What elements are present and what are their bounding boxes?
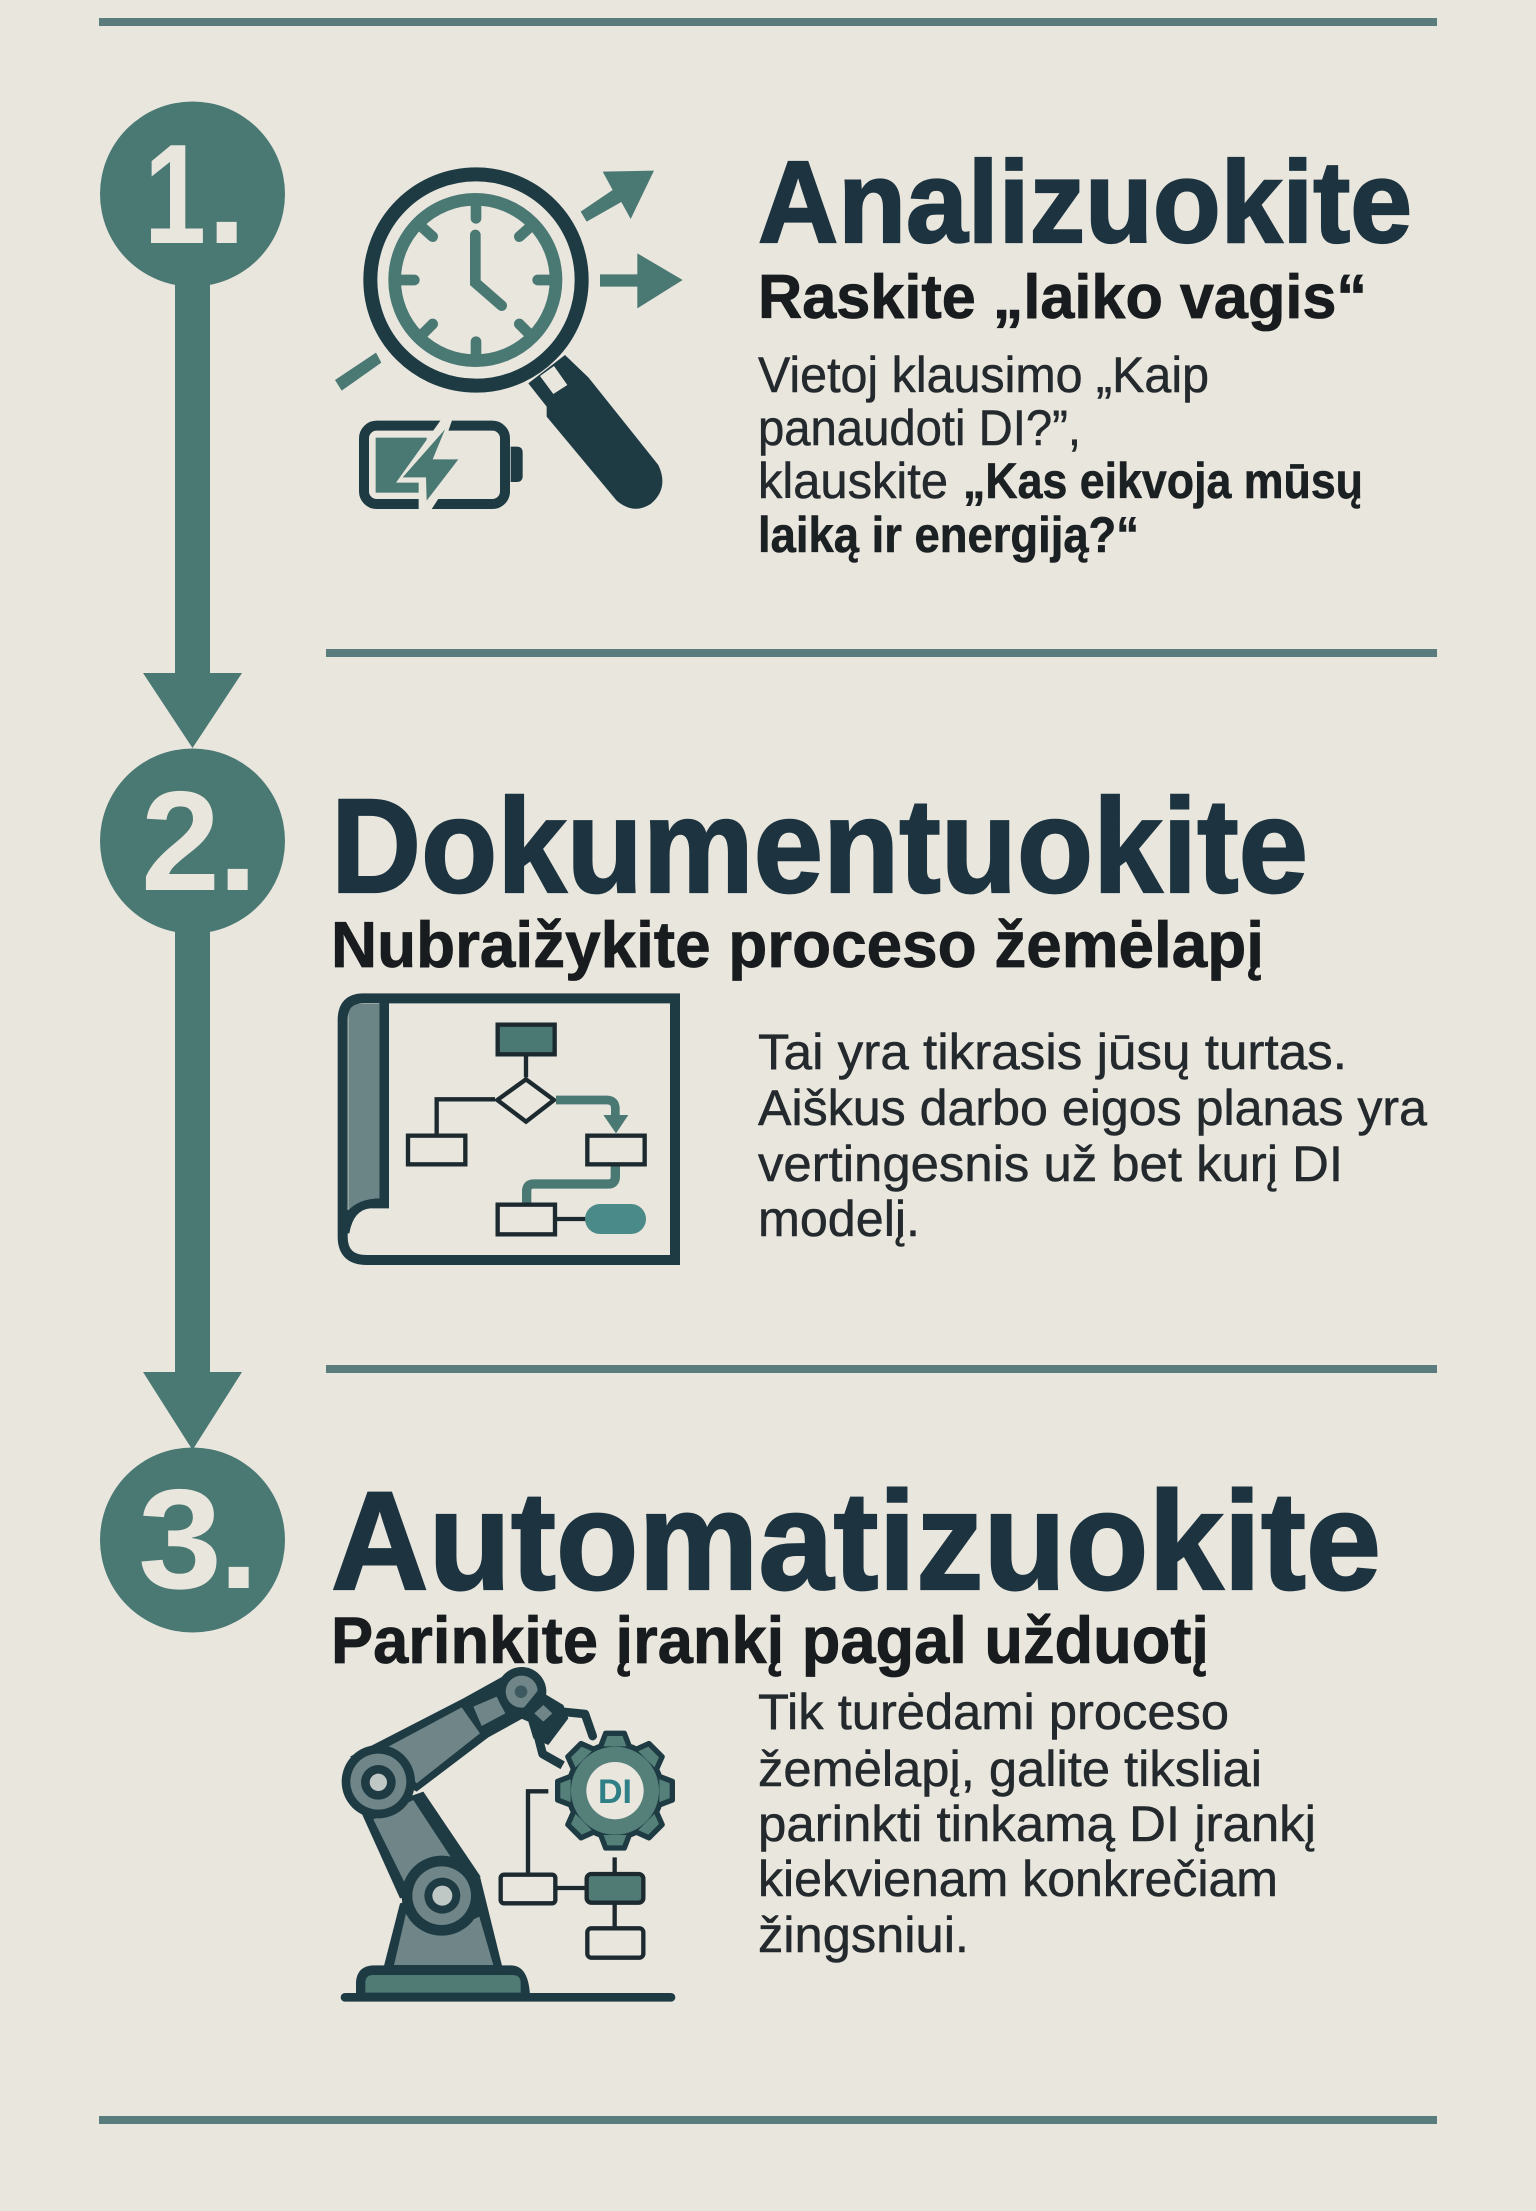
step 3 body text xyxy=(758,1684,1316,1963)
small flowchart xyxy=(501,1791,643,1958)
step 2 body text xyxy=(758,1024,1427,1247)
step 3 body text: parinkti tinkamą DI įrankį xyxy=(758,1796,1316,1852)
step 3 number badge xyxy=(100,1448,285,1632)
step 1 body text: „Kas eikvoja mūsų xyxy=(963,453,1363,509)
flowchart xyxy=(408,1025,646,1234)
step 1 body text: Vietoj klausimo „Kaip xyxy=(758,347,1209,403)
step 1 subheading: Raskite „laiko vagis“ xyxy=(758,263,1367,332)
flow arrow 1 to 2 xyxy=(143,270,242,748)
step 1 body text xyxy=(758,347,1363,563)
step 2 number badge xyxy=(100,748,285,934)
floor and robot base xyxy=(345,1965,671,1997)
step 3 number badge: . xyxy=(219,1460,258,1619)
step 3 heading: Automatizuokite xyxy=(331,1462,1381,1619)
magnifier handle xyxy=(528,355,662,509)
DI gear xyxy=(558,1733,672,1848)
step 2 number badge: . xyxy=(218,762,257,921)
step 3 body text: žemėlapį, galite tiksliai xyxy=(758,1741,1262,1797)
step 1 body text: laiką ir energiją?“ xyxy=(758,507,1139,563)
blueprint sheet xyxy=(340,998,675,1260)
step 1 number badge xyxy=(100,102,285,286)
step 3 body text: žingsniui. xyxy=(758,1907,969,1963)
flow arrow 2 to 3 xyxy=(143,920,242,1450)
icon: robot arm with DI gear xyxy=(342,1667,672,1997)
step 2 body text: vertingesnis už bet kurį DI xyxy=(758,1136,1343,1192)
clock face xyxy=(395,199,556,361)
step 1 number badge: 1 xyxy=(144,115,206,274)
outgoing arrows xyxy=(335,171,683,391)
step 1 number badge: . xyxy=(207,115,246,274)
step 1 heading: Analizuokite xyxy=(758,137,1412,267)
step 2 body text: Aiškus darbo eigos planas yra xyxy=(758,1080,1427,1136)
battery xyxy=(364,418,523,512)
step 3 body text: Tik turėdami proceso xyxy=(758,1684,1229,1740)
DI gear: DI xyxy=(598,1773,632,1811)
step 1 body text: klauskite xyxy=(758,453,948,509)
robot body xyxy=(350,1673,535,1968)
step 2 subheading: Nubraižykite proceso žemėlapį xyxy=(331,908,1264,981)
step 2 heading: Dokumentuokite xyxy=(331,772,1308,921)
step 2 number badge: 2 xyxy=(141,762,220,921)
step 3 number badge: 3 xyxy=(138,1460,222,1619)
icon: magnifier over clock with battery xyxy=(335,171,683,512)
icon: process map blueprint xyxy=(340,998,675,1260)
step 3 subheading: Parinkite įrankį pagal užduotį xyxy=(331,1603,1209,1677)
robot joints xyxy=(342,1667,546,1936)
step 1 body text: panaudoti DI?”, xyxy=(758,400,1081,456)
step 2 body text: modelį. xyxy=(758,1191,920,1247)
robot gripper xyxy=(517,1690,593,1765)
step 2 body text: Tai yra tikrasis jūsų turtas. xyxy=(758,1024,1347,1080)
step 3 body text: kiekvienam konkrečiam xyxy=(758,1851,1278,1907)
magnifier ring xyxy=(370,174,582,386)
